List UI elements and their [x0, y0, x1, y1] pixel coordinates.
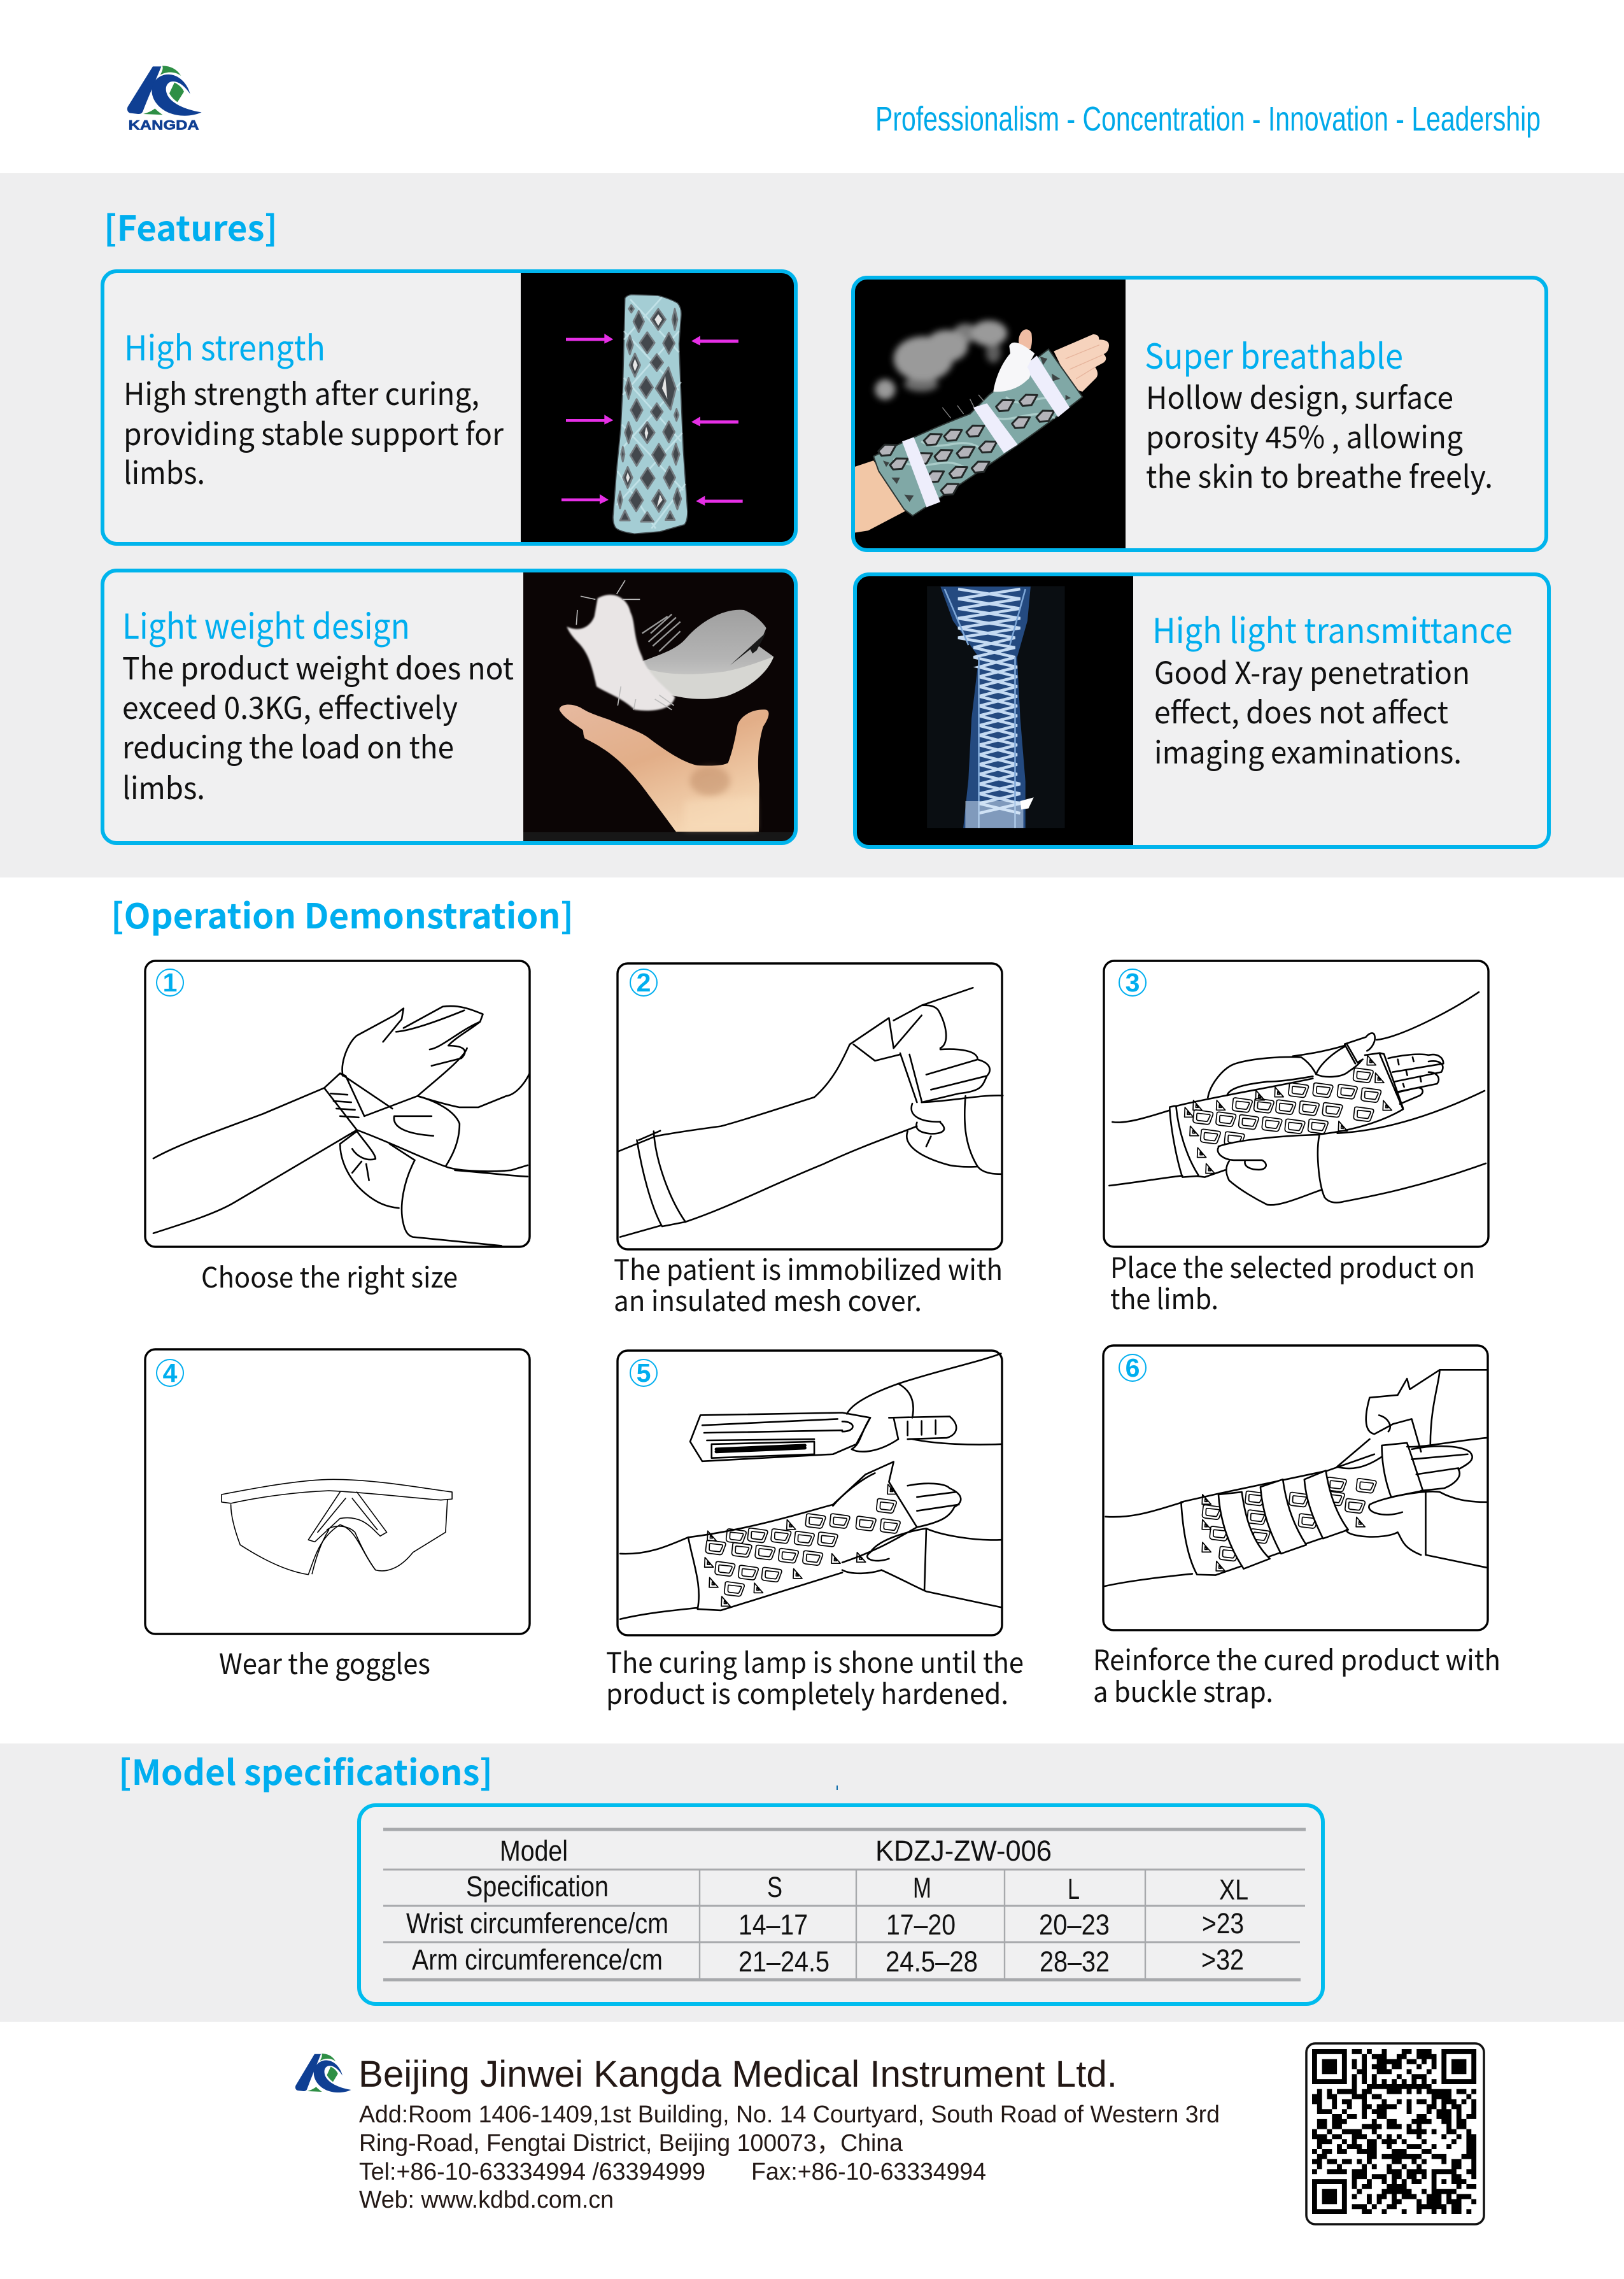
- caption: step 5: product is completely hardened.: [606, 1672, 1008, 1712]
- caption: step 3: [1110, 1246, 1475, 1317]
- panel: high light transmittance: [855, 574, 1549, 847]
- text: super breathable description: [1146, 373, 1493, 497]
- panel: step 2: [618, 963, 1003, 1249]
- table text: 24.5–28: [886, 1945, 978, 1978]
- caption: step 3: Place the selected product on: [1110, 1246, 1475, 1286]
- panel: step 1: [145, 961, 530, 1247]
- heading: company name: Beijing Jinwei Kangda Medical Instrument Ltd.: [358, 2054, 1117, 2095]
- QR code: [1306, 2043, 1484, 2224]
- icon: number 2: [630, 968, 657, 997]
- text: high strength description: [124, 369, 504, 493]
- text: high strength description: limbs.: [124, 448, 205, 493]
- icon: number 2: 2: [637, 968, 651, 997]
- text: super breathable description: the skin to breathe freely.: [1146, 452, 1493, 497]
- icon: number 5: [630, 1358, 657, 1388]
- text: light transmittance description: effect, does not affect: [1154, 688, 1448, 732]
- caption: step 3: the limb.: [1110, 1277, 1218, 1317]
- table text: Specification: [466, 1870, 609, 1903]
- table text: XL: [1219, 1873, 1248, 1906]
- icon: placing product on limb: [1109, 992, 1486, 1205]
- icon: curing lamp over cast: [620, 1354, 1001, 1619]
- icon: insulated mesh cover on arm: [618, 988, 1003, 1237]
- text: contact details: Ring-Road, Fengtai District, Beijing 100073，China: [359, 2130, 903, 2157]
- icon: number 1: [157, 968, 183, 997]
- text: light transmittance description: imaging examinations.: [1154, 728, 1462, 772]
- table text: Model: [500, 1835, 568, 1867]
- text: light weight description: limbs.: [122, 763, 205, 808]
- text: contact details: [359, 2101, 1220, 2213]
- table text: Arm circumference/cm: [412, 1943, 663, 1976]
- panel: step 5: [618, 1351, 1002, 1635]
- text: contact details: Web: www.kdbd.com.cn: [359, 2187, 614, 2213]
- heading: light weight design: Light weight design: [122, 599, 410, 649]
- icon: reinforcing with buckle strap: [1104, 1370, 1486, 1586]
- icon: number 3: [1119, 968, 1146, 997]
- text: contact details: Tel:+86-10-63334994 /63394999: [359, 2159, 705, 2185]
- caption: step 2: The patient is immobilized with: [614, 1247, 1003, 1288]
- caption: step 4: Wear the goggles: [219, 1642, 430, 1682]
- panel: specification table: [359, 1805, 1323, 2004]
- caption: step 2: [614, 1247, 1003, 1319]
- text: light weight description: reducing the load on the: [122, 723, 454, 767]
- table text: >23: [1202, 1907, 1244, 1940]
- panel: high strength: [102, 271, 796, 544]
- heading: Model specifications: [Model specifications]: [118, 1745, 493, 1795]
- panel: step 3: [1104, 961, 1488, 1247]
- table text: 28–32: [1040, 1945, 1110, 1978]
- table text: S: [767, 1871, 782, 1903]
- table text: M: [913, 1871, 931, 1904]
- caption: step 5: The curing lamp is shone until the: [606, 1640, 1024, 1681]
- panel: step 6: [1103, 1345, 1488, 1630]
- text: contact details: Fax:+86-10-63334994: [751, 2159, 986, 2185]
- icon: lattice cast with pressure arrows: [561, 295, 743, 534]
- icon: arm in cast with vapour: [854, 320, 1109, 533]
- band: features background: [0, 173, 1624, 877]
- icon: number 4: 4: [163, 1358, 178, 1388]
- table text: 20–23: [1039, 1908, 1110, 1941]
- text: super breathable description: Hollow design, surface: [1146, 373, 1453, 418]
- caption: step 2: an insulated mesh cover.: [614, 1279, 922, 1319]
- icon: number 4: [157, 1358, 183, 1388]
- table text: L: [1068, 1873, 1080, 1905]
- table text: KDZJ-ZW-006: [875, 1835, 1052, 1867]
- table text: 21–24.5: [738, 1945, 830, 1978]
- caption: step 1: Choose the right size: [201, 1255, 458, 1296]
- heading: super breathable: Super breathable: [1145, 329, 1403, 379]
- icon: x-ray of cast: [927, 586, 1065, 828]
- icon: number 3: 3: [1126, 968, 1140, 997]
- table text: >32: [1201, 1943, 1244, 1976]
- caption: step 6: a buckle strap.: [1093, 1670, 1273, 1710]
- icon: number 5: 5: [637, 1358, 651, 1388]
- text: light weight description: [122, 644, 514, 808]
- heading: high light transmittance: High light transmittance: [1152, 603, 1513, 653]
- heading: Operation Demonstration: [Operation Demonstration]: [111, 888, 574, 939]
- icon: number 6: [1119, 1353, 1146, 1382]
- text: light transmittance description: [1154, 648, 1470, 772]
- text: high strength description: providing stable support for: [124, 409, 504, 454]
- band: model specifications background: [0, 1743, 1624, 2022]
- table text: [406, 1835, 1248, 1978]
- logo: footer Kangda mark: [295, 2054, 351, 2092]
- text: light weight description: exceed 0.3KG, effectively: [122, 683, 458, 728]
- icon: feather above hand: [560, 580, 773, 832]
- table text: 17–20: [886, 1908, 956, 1941]
- logo: Kangda: [127, 66, 202, 132]
- caption: step 5: [606, 1640, 1024, 1712]
- heading: high strength: High strength: [124, 320, 325, 371]
- icon: number 6: 6: [1126, 1353, 1140, 1382]
- panel: super breathable: [853, 278, 1546, 550]
- icon: goggles: [222, 1479, 452, 1575]
- panel: step 4: [145, 1349, 530, 1634]
- text: high strength description: High strength after curing,: [124, 369, 479, 414]
- table text: Wrist circumference/cm: [406, 1907, 668, 1940]
- caption: step 6: [1093, 1638, 1500, 1710]
- caption: step 6: Reinforce the cured product with: [1093, 1638, 1500, 1679]
- text: super breathable description: porosity 45% , allowing: [1146, 413, 1463, 457]
- logo: Kangda: KANGDA: [129, 117, 199, 132]
- icon: measuring the wrist: [153, 1006, 530, 1246]
- heading: Features: [Features]: [104, 201, 278, 251]
- table text: 14–17: [738, 1908, 808, 1941]
- icon: number 1: 1: [163, 968, 177, 997]
- text: light weight description: The product weight does not: [122, 644, 514, 688]
- text: light transmittance description: Good X-ray penetration: [1154, 648, 1470, 693]
- panel: light weight design: [102, 571, 796, 843]
- text: contact details: Add:Room 1406-1409,1st Building, No. 14 Courtyard, South Road of Western 3rd: [359, 2101, 1220, 2128]
